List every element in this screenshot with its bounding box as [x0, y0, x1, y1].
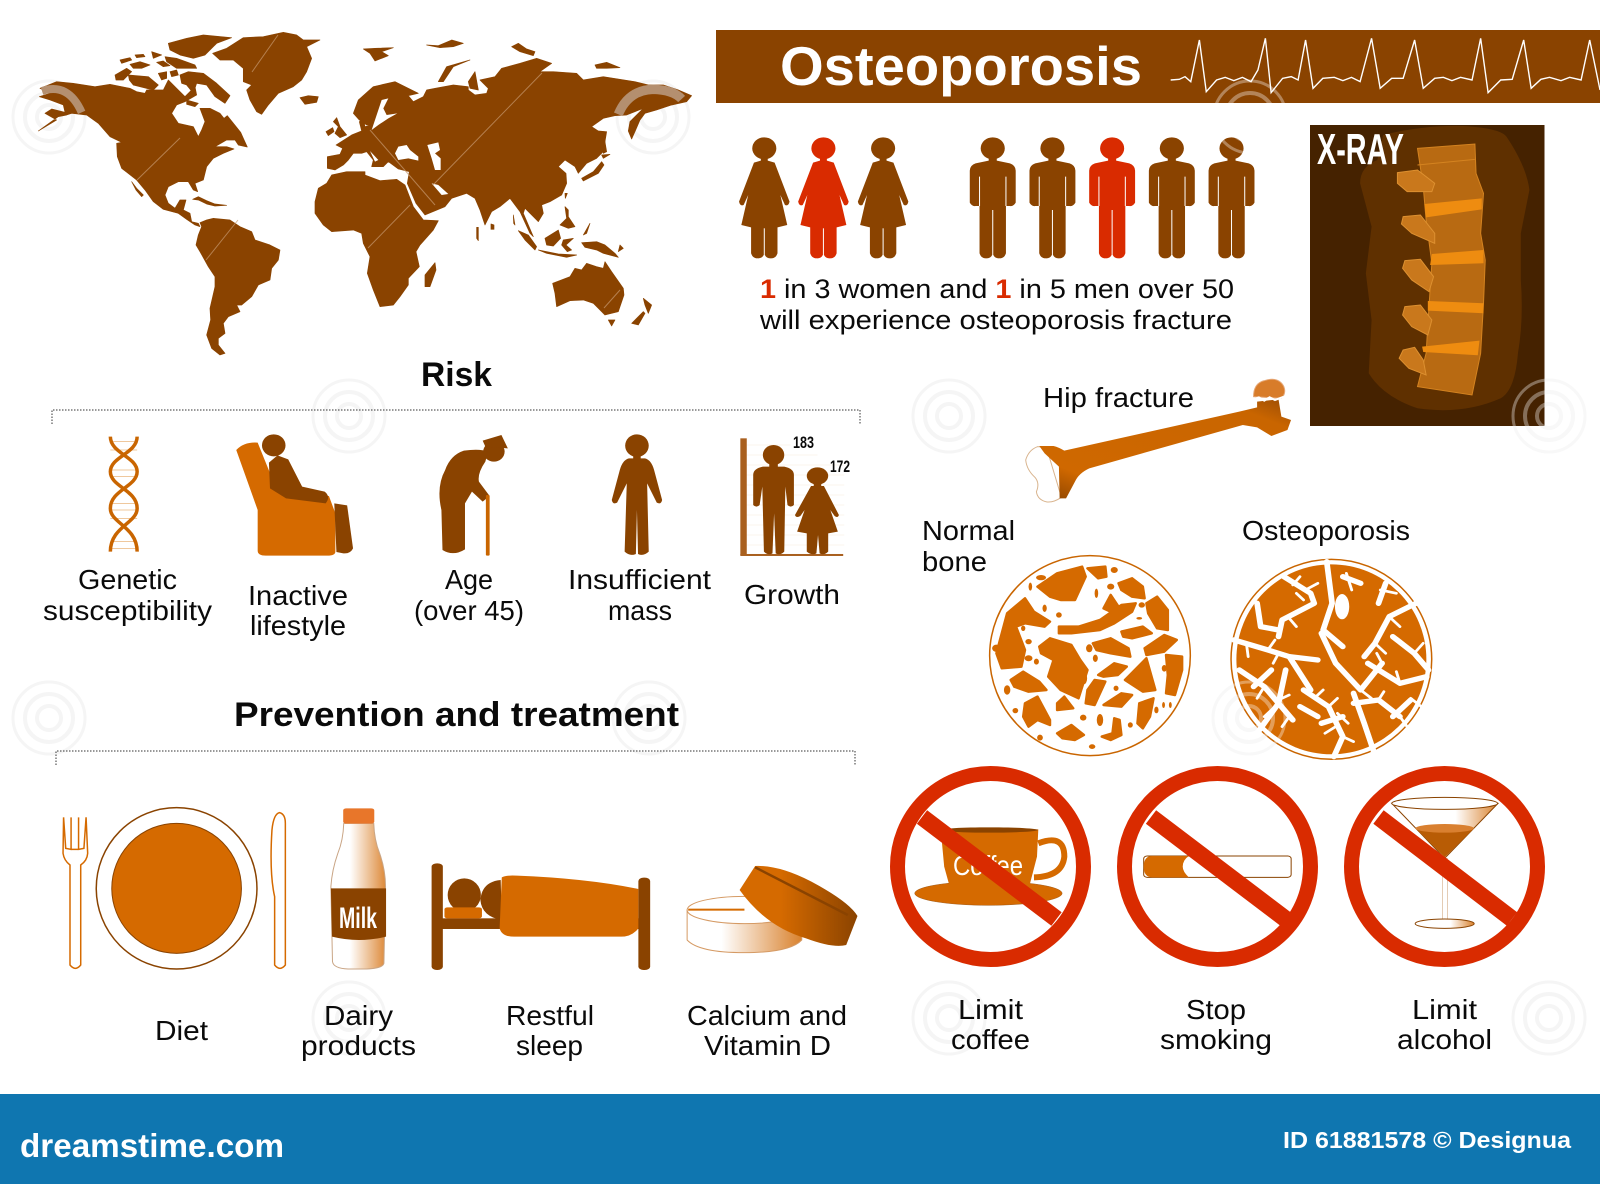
panel: risk factors [43, 433, 850, 641]
label: restful sleep [506, 1000, 594, 1061]
icon: calcium tablets [687, 866, 857, 953]
icon: cigarette [1144, 856, 1291, 877]
label: inactive lifestyle [248, 580, 348, 641]
label: limit alcohol: Limit [1412, 994, 1477, 1025]
label: insufficient mass: mass [608, 595, 672, 626]
label: stop smoking [1160, 994, 1272, 1055]
icon: fractured femur [1026, 379, 1291, 502]
heading: risk: Risk [421, 356, 492, 394]
tan watermark arc on Siberia [618, 89, 682, 114]
title banner [716, 30, 1600, 103]
label: insufficient mass [568, 564, 711, 626]
panel: limit coffee [898, 774, 1084, 1055]
label: osteoporosis: Osteoporosis [1242, 515, 1410, 546]
statistic text: 1 in 3 women and 1 in 5 men over 50 [760, 274, 1234, 304]
label: age [414, 564, 524, 626]
x-ray label: X-RAY [1317, 125, 1404, 174]
label: inactive lifestyle: lifestyle [250, 610, 346, 641]
height value 172: 172 [830, 457, 850, 476]
label: dairy products [301, 1000, 416, 1061]
woman 1 [739, 137, 790, 258]
panel: prevention and treatment [63, 808, 857, 1061]
man 3 highlighted [1089, 137, 1135, 258]
label: stop smoking: Stop [1186, 994, 1246, 1025]
label: growth: Growth [744, 579, 840, 610]
icon: normal bone cross-section [990, 556, 1190, 756]
icon: martini glass [1392, 797, 1498, 928]
icon: person in armchair [236, 434, 353, 556]
panel: hip fracture [1026, 379, 1291, 502]
woman 2 highlighted [798, 137, 849, 258]
man 2 [1029, 137, 1075, 258]
world map [38, 32, 692, 355]
milk label text: Milk [339, 902, 377, 935]
label: stop smoking: smoking [1160, 1024, 1272, 1055]
label: dairy products: products [301, 1030, 416, 1061]
icon: height chart [740, 438, 844, 556]
risk bracket [52, 410, 860, 424]
label: calcium and vitamin d [687, 1000, 847, 1061]
label: age: Age [445, 564, 493, 595]
label: normal bone [922, 515, 1015, 577]
label: limit coffee: Limit [958, 994, 1023, 1025]
label: restful sleep: sleep [516, 1030, 583, 1061]
icon: prohibition sign [898, 774, 1084, 960]
label: diet: Diet [155, 1015, 208, 1046]
label: calcium and vitamin d: Vitamin D [704, 1030, 831, 1061]
prevention bracket [56, 751, 855, 765]
icon: dna helix [110, 437, 137, 552]
tan watermark arc on Alaska [42, 89, 82, 112]
coffee cup lettering: Coffee [953, 850, 1023, 881]
icon: osteoporotic bone cross-section [1231, 559, 1432, 759]
heading: prevention and treatment: Prevention and treatment [234, 696, 679, 734]
man 1 [970, 137, 1016, 258]
panel: stop smoking [1124, 774, 1310, 1055]
label: normal bone: Normal [922, 515, 1015, 546]
icons: women and men statistic [739, 137, 1254, 258]
panel: limit alcohol [1352, 774, 1538, 1055]
label: inactive lifestyle: Inactive [248, 580, 348, 611]
footer band [0, 1094, 1600, 1184]
label: hip fracture: Hip fracture [1043, 382, 1194, 413]
man 4 [1149, 137, 1195, 258]
icon: person sleeping in bed [432, 863, 650, 970]
label: age: (over 45) [414, 595, 524, 626]
man 5 [1209, 137, 1254, 258]
label: calcium and vitamin d: Calcium and [687, 1000, 847, 1031]
label: limit alcohol: alcohol [1397, 1024, 1492, 1055]
woman 3 [858, 137, 908, 258]
icon: prohibition sign [1352, 774, 1538, 960]
spine [1397, 144, 1485, 395]
icon: prohibition sign [1124, 774, 1310, 960]
panel: x-ray of spine [1310, 125, 1544, 426]
label: genetic susceptibility: susceptibility [43, 595, 212, 626]
label: genetic susceptibility [43, 564, 212, 626]
icon: milk bottle [331, 808, 386, 969]
panel: normal bone [922, 515, 1190, 756]
icon: heartbeat line [1171, 38, 1600, 93]
footer site name: dreamstime.com [20, 1127, 284, 1164]
label: limit alcohol [1397, 994, 1492, 1055]
label: insufficient mass: Insufficient [568, 564, 711, 595]
label: limit coffee: coffee [951, 1024, 1030, 1055]
statistic text [759, 274, 1234, 335]
label: normal bone: bone [922, 546, 987, 577]
label: limit coffee [951, 994, 1030, 1055]
icon: coffee cup [915, 827, 1064, 905]
title: Osteoporosis [780, 35, 1142, 97]
icon: thin person [612, 434, 662, 555]
label: genetic susceptibility: Genetic [78, 564, 177, 595]
icon: elderly person with cane [439, 435, 508, 556]
label: restful sleep: Restful [506, 1000, 594, 1031]
statistic text: will experience osteoporosis fracture [759, 305, 1232, 335]
panel: osteoporosis bone [1231, 515, 1432, 759]
height value 183: 183 [793, 433, 814, 452]
footer image id and credit: ID 61881578 © Designua [1283, 1127, 1571, 1153]
icon: plate with fork and knife [63, 808, 285, 969]
label: dairy products: Dairy [324, 1000, 393, 1031]
